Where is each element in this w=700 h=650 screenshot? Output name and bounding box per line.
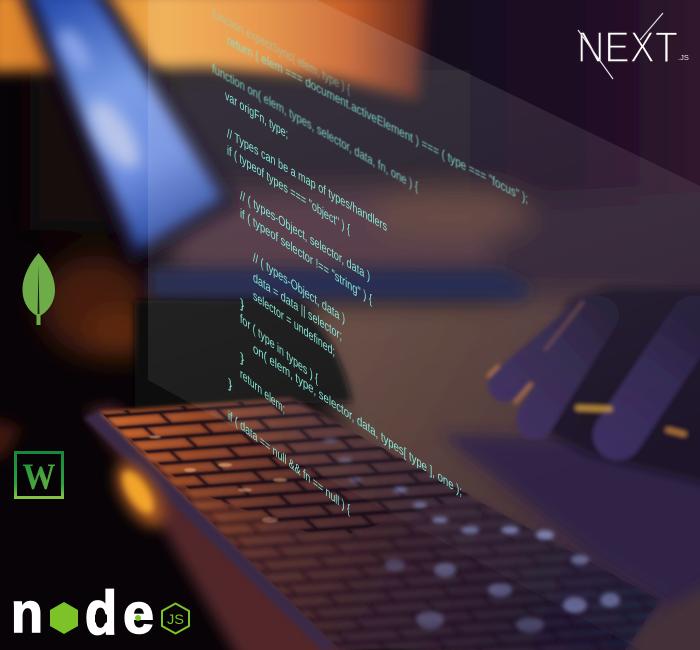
logo: W box: W bbox=[22, 457, 56, 498]
small brown wedge at left edge bbox=[0, 412, 22, 458]
code lines on glass: if ( typeof selector !== "string" ) { bbox=[240, 206, 372, 308]
logo: MongoDB leaf bbox=[22, 253, 55, 325]
dark gap between fingers bbox=[575, 350, 650, 440]
top orange glow bbox=[0, 0, 425, 100]
dark base of the laptop screen bbox=[135, 300, 352, 408]
logo: Next.js: .JS bbox=[678, 53, 689, 62]
JS hexagon bbox=[162, 604, 189, 634]
code lines on glass: var origFn, type; bbox=[225, 88, 288, 142]
blue band behind the laptop bbox=[150, 268, 530, 300]
key glow spots bbox=[323, 438, 620, 633]
JS hexagon: JS bbox=[167, 611, 184, 627]
middle finger bbox=[535, 315, 600, 420]
ring finger bbox=[618, 320, 695, 435]
logo: Node.js: d bbox=[85, 580, 117, 648]
laptop front body bbox=[84, 405, 370, 650]
code lines on glass: data = data || selector; bbox=[253, 270, 342, 344]
code lines on glass: // Types can be a map of types/handlers bbox=[227, 125, 387, 234]
code lines on glass: if ( typeof types === "object" ) { bbox=[227, 143, 350, 238]
finger highlights bbox=[488, 302, 684, 434]
glass panel bbox=[148, 0, 700, 650]
code lines on glass: function expectSync( elem, type ) { bbox=[212, 5, 350, 97]
index finger bbox=[505, 312, 590, 385]
laptop keyboard bbox=[98, 396, 660, 650]
code lines on glass: if ( data == null && fn == null ) { bbox=[228, 408, 350, 518]
code lines on glass: selector = undefined; bbox=[253, 288, 335, 360]
hand on trackpad bbox=[488, 287, 700, 490]
code lines on glass: // ( types-Object, data ) bbox=[253, 250, 345, 327]
code lines on glass: function on( elem, types, selector, data, fn, one ) { bbox=[212, 60, 418, 194]
logo: Node.js: e bbox=[123, 582, 154, 646]
code lines on glass: on( elem, type, selector, data, types[ type ], one ); bbox=[253, 341, 462, 500]
code lines on glass: return elem; bbox=[240, 366, 285, 417]
code lines on glass bbox=[212, 5, 528, 518]
trackpad surface bbox=[440, 434, 700, 610]
blurred laptop screen bbox=[18, 0, 240, 268]
logo: Node.js: n bbox=[11, 581, 43, 645]
code lines on glass: for ( type in types ) { bbox=[240, 312, 318, 387]
logo: Next.js: NEXT bbox=[577, 23, 678, 72]
code lines on glass: // ( types-Object, selector, data ) bbox=[240, 188, 370, 285]
code lines on glass: } bbox=[240, 296, 244, 314]
code lines on glass: } bbox=[240, 350, 244, 368]
logo: Node.js bbox=[11, 580, 189, 648]
front right corner bbox=[620, 570, 700, 650]
code lines on glass: } bbox=[228, 376, 232, 394]
code lines on glass: return ( elem === document.activeElement ) === ( type === "focus" ); bbox=[227, 32, 528, 206]
